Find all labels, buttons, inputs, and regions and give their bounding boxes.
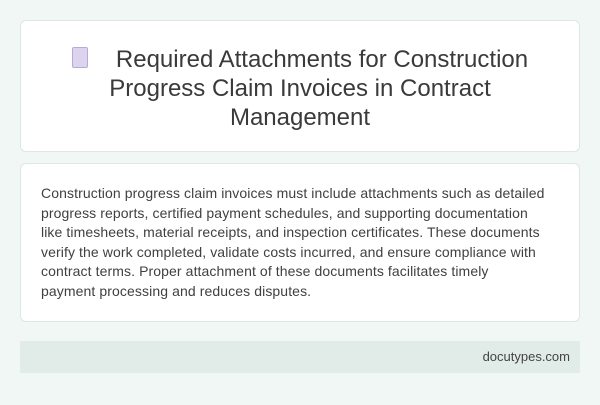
title: [72, 46, 528, 131]
description card: [20, 163, 580, 322]
title: Management: [230, 104, 370, 131]
description text: progress reports, certified payment schedules, and supporting documentation: [41, 204, 528, 220]
title card: [20, 20, 580, 152]
icon: document: [72, 47, 88, 68]
description text: payment processing and reduces disputes.: [41, 282, 311, 298]
description text: [41, 185, 544, 299]
description text: Construction progress claim invoices must include attachments such as detailed: [41, 185, 544, 201]
footer bar: [20, 341, 580, 373]
title: Required Attachments for Construction: [116, 46, 528, 73]
description text: verify the work completed, validate costs incurred, and ensure compliance with: [41, 244, 536, 260]
footer text: docutypes.com: [483, 349, 570, 364]
title: Progress Claim Invoices in Contract: [109, 75, 491, 102]
description text: contract terms. Proper attachment of these documents facilitates timely: [41, 263, 489, 279]
description text: like timesheets, material receipts, and inspection certificates. These documents: [41, 224, 540, 240]
